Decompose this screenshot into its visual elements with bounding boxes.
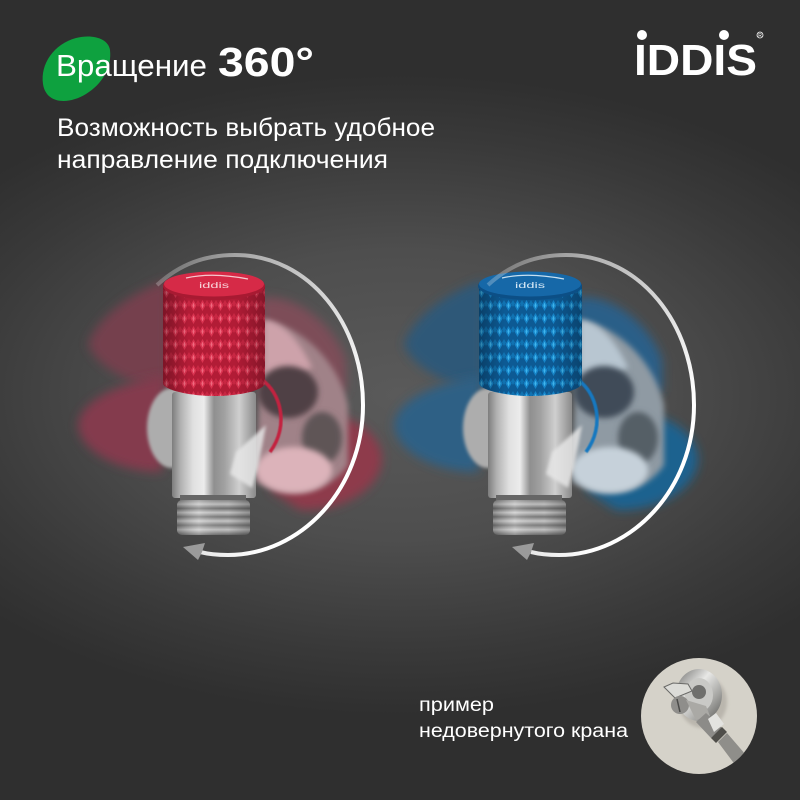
subtitle text: Возможность выбрать удобное	[57, 114, 435, 142]
logo: IDDIS: R	[758, 33, 762, 39]
valve in photo	[663, 669, 744, 762]
left body blur	[147, 388, 197, 468]
chrome side handle highlight	[230, 425, 266, 488]
rotation arrow	[157, 255, 363, 560]
blue knurled handle: iddis	[515, 281, 545, 290]
threaded connector	[493, 495, 566, 535]
heading number: 360°	[218, 39, 314, 85]
logo: IDDIS: IDDIS	[634, 36, 757, 85]
rotation arrow	[488, 255, 694, 560]
blue knurled handle	[478, 272, 582, 396]
blue valve with rotation arrow	[394, 255, 698, 560]
green blob accent	[43, 36, 110, 101]
chrome side handle highlight	[546, 425, 582, 488]
red valve with rotation arrow	[78, 255, 382, 560]
chrome body	[172, 392, 256, 498]
left body blur	[463, 388, 513, 468]
example caption: пример	[419, 695, 494, 716]
example photo of an under-turned valve	[641, 658, 757, 774]
heading: rotation 360	[43, 36, 314, 101]
heading text: Вращение	[56, 48, 207, 83]
motion blur: red	[78, 280, 382, 510]
threaded connector	[177, 495, 250, 535]
subtitle text: направление подключения	[57, 146, 388, 174]
chrome body	[488, 392, 572, 498]
example caption: недовернутого крана	[419, 721, 628, 742]
wall flange blur	[256, 320, 348, 493]
red knurled handle: iddis	[199, 281, 229, 290]
wall flange blur	[572, 320, 664, 493]
red knurled handle	[163, 272, 265, 396]
subtitle text	[57, 114, 435, 174]
example caption	[419, 695, 628, 742]
motion blur: blue	[394, 280, 698, 510]
